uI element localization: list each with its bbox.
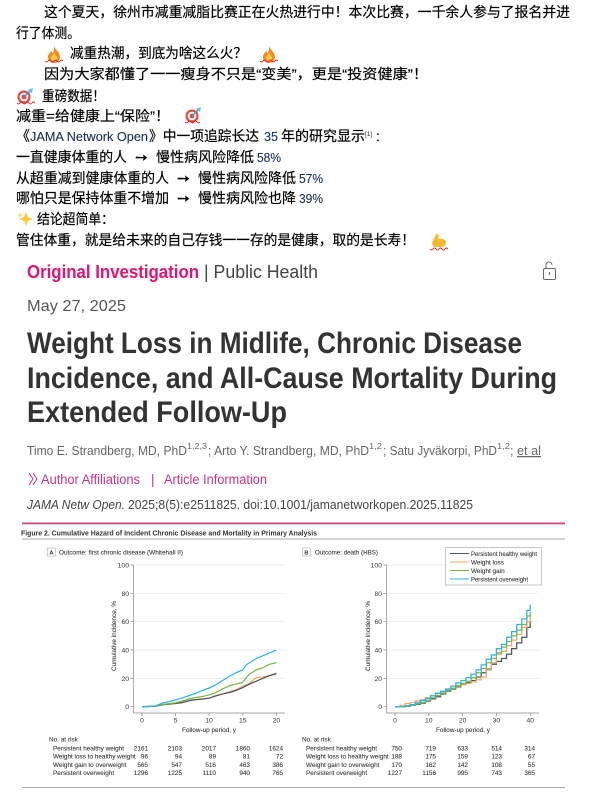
article header [27, 262, 318, 282]
citation: 2025;8(5):e2511825. doi:10.1001/jamanetworkopen.2025.11825 [128, 498, 473, 512]
table B: number at risk: 67 [528, 754, 535, 760]
y axis labels: 40 [374, 648, 382, 654]
table A: number at risk: Weight gain to overweight [53, 762, 127, 769]
table B: number at risk: 719 [425, 745, 436, 752]
table B: number at risk: 365 [524, 770, 535, 777]
table B: number at risk: 108 [491, 762, 502, 769]
table B: number at risk: No. at risk [302, 736, 332, 744]
authors: 1,2,3 [187, 442, 208, 451]
data heading with target icon [17, 88, 105, 104]
authors: ; Arto Y. Strandberg, MD, PhD [208, 444, 369, 458]
table A: number at risk: Persistent overweight [53, 770, 114, 777]
y axis labels: 60 [121, 619, 129, 626]
stat: 58%: 慢性病风险降低 [156, 149, 254, 165]
panel A label: Outcome: first chronic disease (Whitehall II) [59, 550, 183, 556]
x axis labels: 20 [273, 718, 280, 724]
table B: number at risk: 123 [491, 754, 502, 760]
x axis labels: 0 [393, 718, 397, 724]
table A: number at risk: 2161 [134, 745, 148, 752]
hook line with flame icons: 减重热潮，到底为啥这么火？ [70, 45, 247, 61]
study intro line: 》中一项追踪长达 [149, 128, 259, 144]
stat: 39% [16, 190, 323, 206]
stat: 57%: ➙ [177, 170, 190, 186]
legend: Weight gain [471, 568, 505, 575]
authors: ; Satu Jyväkorpi, PhD [383, 444, 497, 458]
table A: number at risk: 765 [272, 770, 283, 777]
study intro line: 《 [16, 128, 30, 144]
table B: number at risk: 314 [524, 745, 535, 752]
table B: number at risk: 1227 [388, 770, 402, 777]
intro paragraph: 行了体测。 [16, 25, 80, 41]
table B: number at risk [302, 736, 535, 777]
explanation line: 因为大家都懂了一一瘦身不只是“变美”，更是“投资健康”！ [44, 66, 428, 82]
x axis labels: 10 [425, 718, 433, 724]
table A: number at risk: 463 [239, 762, 250, 769]
panel B label: Outcome: death (HBS) [315, 550, 378, 556]
table B: number at risk: 743 [491, 770, 502, 777]
table B: number at risk: 175 [425, 754, 436, 760]
table A: number at risk: 81 [243, 754, 250, 760]
y axis labels: 0 [378, 704, 382, 711]
y axis labels: 80 [374, 591, 382, 598]
y axis title: Cumulative incidence, % [111, 601, 118, 671]
table A: number at risk: 565 [137, 762, 148, 769]
table B: number at risk: 159 [457, 754, 468, 760]
article header: Original Investigation [27, 262, 199, 282]
y axis title: Cumulative incidence, % [365, 601, 372, 671]
authors: Timo E. Strandberg, MD, PhD [27, 444, 187, 458]
x axis labels [140, 718, 280, 724]
article header: | Public Health [204, 262, 318, 282]
panel B label: B [304, 550, 309, 556]
article links: Author Affiliations [41, 472, 140, 487]
table A: number at risk: 1860 [236, 745, 250, 752]
x axis title: Follow-up period, y [182, 727, 237, 734]
x axis labels: 0 [140, 718, 144, 724]
table B: number at risk: Weight loss to healthy weight [306, 754, 389, 760]
stat: 57%: 57% [299, 172, 323, 186]
table B: number at risk: Persistent overweight [306, 770, 367, 777]
table A: number at risk: 96 [141, 754, 148, 760]
legend: Persistent overweight [471, 576, 528, 584]
insurance line with target icon: 减重=给健康上“保险”！ [16, 108, 170, 124]
table A: number at risk: 1225 [168, 770, 182, 777]
table B: number at risk: 142 [457, 762, 468, 769]
stat: 57%: 慢性病风险降低 [198, 170, 296, 186]
stat: 39%: ➙ [177, 190, 190, 206]
table B: number at risk: Weight gain to overweight [306, 762, 380, 769]
table A: number at risk: 547 [171, 762, 182, 769]
table A: number at risk: 1296 [134, 770, 148, 777]
table B: number at risk: 633 [457, 745, 468, 752]
data heading with target icon: 重磅数据！ [42, 88, 105, 104]
authors [27, 442, 541, 458]
stat: 39%: 哪怕只是保持体重不增加 [16, 190, 169, 206]
article links: | [151, 472, 155, 487]
stat: 57% [16, 170, 323, 186]
intro paragraph [16, 4, 570, 41]
y axis labels: 100 [118, 562, 129, 570]
hook line with flame icons [45, 45, 278, 63]
x axis labels: 15 [239, 718, 247, 724]
stat: 58% [16, 149, 281, 165]
article links: Article Information [164, 472, 267, 487]
y axis labels [371, 562, 382, 711]
authors: 1,2 [369, 442, 383, 451]
curves B [395, 605, 530, 707]
stat: 58%: 一直健康体重的人 [16, 149, 127, 165]
table A: number at risk: 940 [239, 770, 250, 777]
y axis labels: 40 [121, 648, 129, 654]
table A: number at risk [49, 736, 283, 777]
study intro line [16, 128, 380, 144]
curves A [142, 650, 276, 707]
x axis title: Follow-up period, y [436, 727, 491, 734]
study intro line: 年的研究显示 [281, 128, 365, 144]
panel A: first chronic disease chart [48, 548, 285, 734]
table B: number at risk: 514 [491, 745, 502, 752]
figure top rule [22, 522, 565, 524]
conclusion line with muscle icon: 管住体重，就是给未来的自己存钱一一存的是健康，取的是长寿！ [16, 232, 415, 248]
x axis labels: 5 [174, 718, 178, 724]
intro paragraph: 这个夏天，徐州市减重减脂比赛正在火热进行中！本次比赛，一千余人参与了报名并进 [44, 4, 570, 20]
table B: number at risk: 995 [457, 770, 468, 777]
table B: number at risk: 1156 [422, 770, 436, 777]
table A: number at risk: 89 [209, 754, 216, 760]
stat: 58%: ➙ [135, 149, 148, 165]
panel A label: A [49, 550, 54, 556]
table A: number at risk: 1624 [269, 745, 283, 752]
article title: Extended Follow-Up [27, 396, 287, 429]
legend: Weight loss [471, 560, 504, 566]
table B: number at risk: Persistent healthy weight [306, 745, 377, 752]
authors: ; [510, 444, 513, 458]
table B: number at risk: 188 [391, 754, 402, 760]
y axis labels: 0 [125, 704, 129, 711]
table A: number at risk: Persistent healthy weight [53, 745, 124, 752]
authors: et al [517, 444, 541, 458]
legend [446, 548, 542, 585]
table A: number at risk: 2103 [168, 745, 182, 752]
y axis labels: 100 [371, 562, 382, 570]
legend: Persistent healthy weight [471, 551, 537, 558]
stat: 58%: 58% [257, 151, 281, 165]
table B: number at risk: 750 [391, 745, 402, 752]
x axis labels: 40 [527, 718, 534, 724]
table A: number at risk: 94 [175, 754, 182, 760]
study intro line: : [376, 128, 380, 144]
y axis labels: 20 [374, 676, 382, 683]
stat: 39%: 39% [299, 192, 323, 206]
table A: number at risk: 1110 [203, 770, 216, 777]
x axis labels [393, 718, 534, 724]
table A: number at risk: 2017 [202, 745, 216, 752]
table B: number at risk: 162 [425, 762, 436, 769]
figure title: Figure 2. Cumulative Hazard of Incident Chronic Disease and Mortality in Primary Analysis [21, 528, 317, 538]
stat: 39%: 慢性病风险也降 [198, 190, 296, 206]
table A: number at risk: 516 [205, 762, 216, 769]
authors: 1,2 [497, 442, 511, 451]
citation: JAMA Netw Open. [26, 498, 125, 512]
article links [29, 472, 267, 487]
stat: 57%: 从超重减到健康体重的人 [16, 170, 169, 186]
article title: Weight Loss in Midlife, Chronic Disease [27, 327, 522, 360]
y axis labels [118, 562, 129, 711]
table B: number at risk: 55 [528, 762, 535, 769]
article title [27, 327, 557, 429]
table A: number at risk: Weight loss to healthy weight [53, 754, 136, 760]
conclusion heading with sparkle icon: 结论超简单： [37, 211, 114, 227]
study intro line: JAMA Network Open [30, 130, 148, 144]
study intro line: [1] [365, 131, 372, 138]
x axis labels: 20 [459, 718, 467, 724]
table B: number at risk: 170 [391, 762, 402, 769]
y axis labels: 20 [121, 676, 129, 683]
panel B label [302, 548, 378, 556]
study intro line: 35 [264, 130, 278, 144]
y axis labels: 80 [121, 591, 129, 598]
table A: number at risk: No. at risk [49, 736, 79, 744]
x axis labels: 10 [205, 718, 213, 724]
panel B: death chart [302, 548, 542, 734]
table A: number at risk: 72 [276, 754, 283, 760]
publication date: May 27, 2025 [27, 298, 126, 315]
x axis labels: 30 [493, 718, 500, 724]
icon: open lock [544, 262, 556, 280]
y axis labels: 60 [374, 619, 382, 626]
table A: number at risk: 386 [272, 762, 283, 769]
